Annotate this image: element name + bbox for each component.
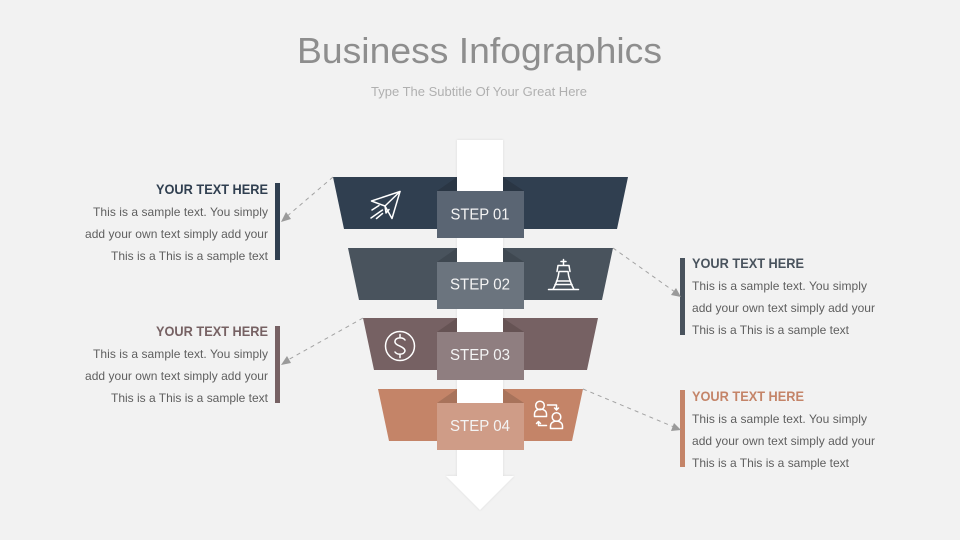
callout: upper right: add your own text simply add your	[692, 301, 875, 315]
subtitle: Type The Subtitle Of Your Great Here	[371, 84, 587, 99]
band 1	[333, 177, 628, 229]
central down arrow	[446, 140, 514, 510]
callout: upper right: This is a sample text. You simply	[692, 279, 867, 293]
callout: lower right: This is a This is a sample text	[692, 456, 850, 470]
callout: top left: This is a sample text. You simply	[93, 205, 268, 219]
band 3	[363, 318, 598, 370]
callout: upper right: This is a This is a sample text	[692, 323, 850, 337]
callout: upper right	[680, 255, 875, 337]
callout: middle left	[85, 323, 280, 405]
callout: lower right: add your own text simply add your	[692, 434, 875, 448]
callout: middle left: This is a sample text. You simply	[93, 347, 268, 361]
step 04 box: STEP 04	[450, 418, 510, 435]
callout: lower right: YOUR TEXT HERE	[692, 388, 804, 404]
step 01 box	[437, 177, 524, 238]
icon: people exchange	[534, 401, 562, 428]
step 01 box: STEP 01	[450, 206, 510, 224]
band 4	[378, 389, 583, 441]
arrow: band 3 to middle left callout	[281, 318, 363, 365]
step 03 box: STEP 03	[450, 347, 510, 364]
icon: chess king	[548, 260, 578, 290]
band 2	[348, 248, 613, 300]
arrow: band 4 to lower right callout	[583, 389, 681, 431]
callout: middle left: add your own text simply add your	[85, 369, 268, 383]
callout: lower right: This is a sample text. You simply	[692, 412, 867, 426]
title: Business Infographics	[297, 30, 662, 71]
callout: top left: YOUR TEXT HERE	[156, 181, 268, 197]
step 02 box	[437, 248, 524, 309]
arrow: band 2 to upper right callout	[613, 248, 681, 297]
step 04 box	[437, 389, 524, 450]
callout: upper right: YOUR TEXT HERE	[692, 255, 804, 271]
callout: top left: add your own text simply add your	[85, 227, 268, 241]
callout: lower right	[680, 388, 875, 470]
arrow: band 1 to top left callout	[281, 177, 333, 222]
step 03 box	[437, 318, 524, 380]
callout: top left: This is a This is a sample text	[111, 249, 269, 263]
step 02 box: STEP 02	[450, 276, 510, 294]
callout: top left	[85, 181, 280, 263]
icon: dollar coin	[386, 332, 414, 360]
icon: paper plane	[371, 192, 400, 218]
callout: middle left: YOUR TEXT HERE	[156, 323, 268, 339]
callout: middle left: This is a This is a sample text	[111, 391, 269, 405]
